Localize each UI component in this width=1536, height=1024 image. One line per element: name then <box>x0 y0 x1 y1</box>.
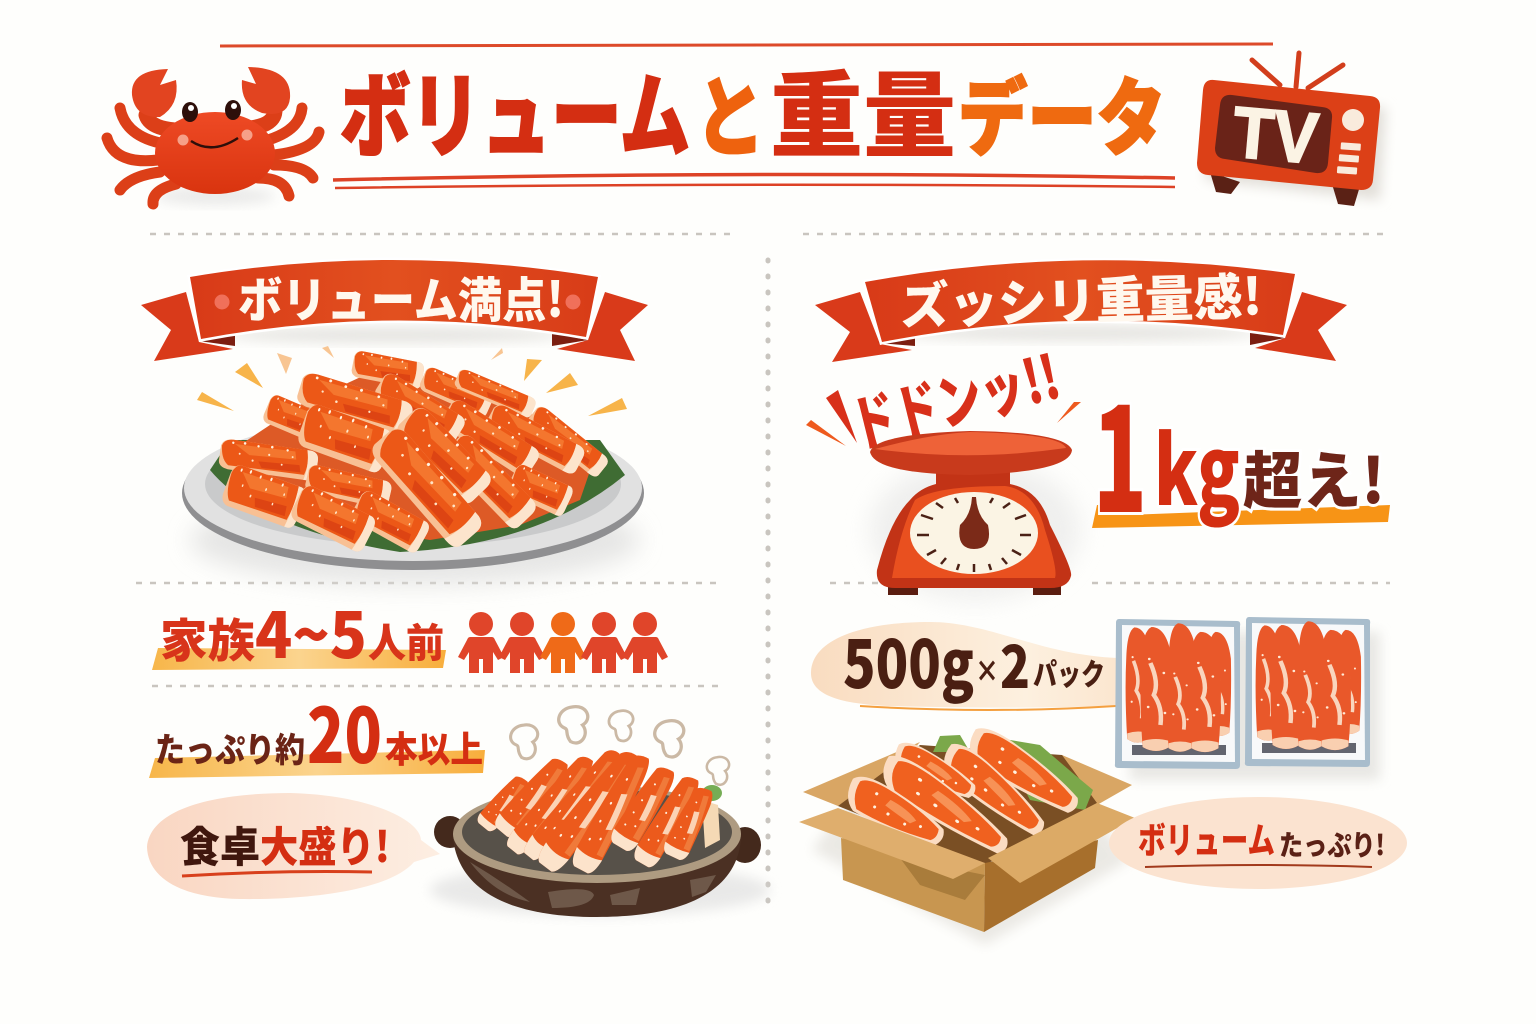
headline: over 1kg: kg <box>1154 396 1240 533</box>
title text: 重量 <box>770 64 956 169</box>
icon: crab mascot <box>107 67 319 205</box>
speech bubble: plenty of volume <box>1109 797 1407 889</box>
panel: volume left <box>141 258 770 917</box>
banner: ボリューム満点: ボリューム満点! <box>238 261 564 331</box>
illustration: kitchen scale <box>870 431 1080 600</box>
title text <box>340 64 1166 169</box>
banner: ズッシリ重量感: ズッシリ重量感! <box>899 257 1263 339</box>
speech bubble: plenty of volume: たっぷり! <box>1279 824 1385 864</box>
dotted dividers <box>136 234 1390 905</box>
illustration: hot pot with crab legs <box>430 743 770 917</box>
callout: dodon: ドドンッ!! <box>841 329 1068 465</box>
banner: ズッシリ重量感 <box>815 257 1347 362</box>
title underlines <box>333 174 1175 188</box>
illustration: two vacuum packs <box>1115 617 1380 780</box>
fact: about 20 legs <box>149 675 485 785</box>
callout: 500g x 2 packs: 2 <box>1000 621 1030 705</box>
headline: over 1kg <box>1092 346 1390 554</box>
fact: about 20 legs: 20 <box>307 675 382 785</box>
title header <box>220 44 1273 188</box>
callout: 500g x 2 packs: × <box>975 647 999 691</box>
callout: 500g x 2 packs <box>811 612 1118 710</box>
title text: と <box>695 69 765 168</box>
fact: family serving: 4~5 <box>255 586 367 677</box>
illustration: crab legs plate <box>182 350 644 585</box>
speech bubble: table heaped: 食卓 <box>180 824 260 871</box>
fact: about 20 legs: たっぷり約 <box>155 732 305 770</box>
fact: family serving <box>152 586 446 677</box>
title text: データ <box>958 72 1166 166</box>
title text: ボリューム <box>340 67 690 169</box>
icon: five people <box>458 612 668 673</box>
icon: steam puffs <box>511 707 729 785</box>
sparkle rays <box>197 346 627 416</box>
panel: weight right <box>799 257 1407 945</box>
callout: 500g x 2 packs: 500g <box>843 612 974 708</box>
fact: family serving: 人前 <box>368 622 444 666</box>
title top rule <box>220 44 1273 46</box>
headline: over 1kg: 超え! <box>1243 431 1385 521</box>
speech bubble: plenty of volume: ボリューム <box>1138 820 1275 861</box>
callout: dodon <box>806 329 1081 465</box>
icon: retro tv <box>1197 53 1386 206</box>
tv label: TV <box>1230 92 1321 180</box>
banner: ボリューム満点 <box>141 258 648 361</box>
illustration: cardboard box with crab legs <box>799 721 1135 945</box>
speech bubble: table heaped: 大盛り! <box>260 814 390 875</box>
speech bubble: table heaped <box>147 793 440 899</box>
headline: over 1kg: 1 <box>1093 346 1147 554</box>
fact: family serving: 家族 <box>160 615 255 667</box>
fact: about 20 legs: 本以上 <box>385 729 483 770</box>
callout: 500g x 2 packs: パック <box>1033 659 1105 692</box>
